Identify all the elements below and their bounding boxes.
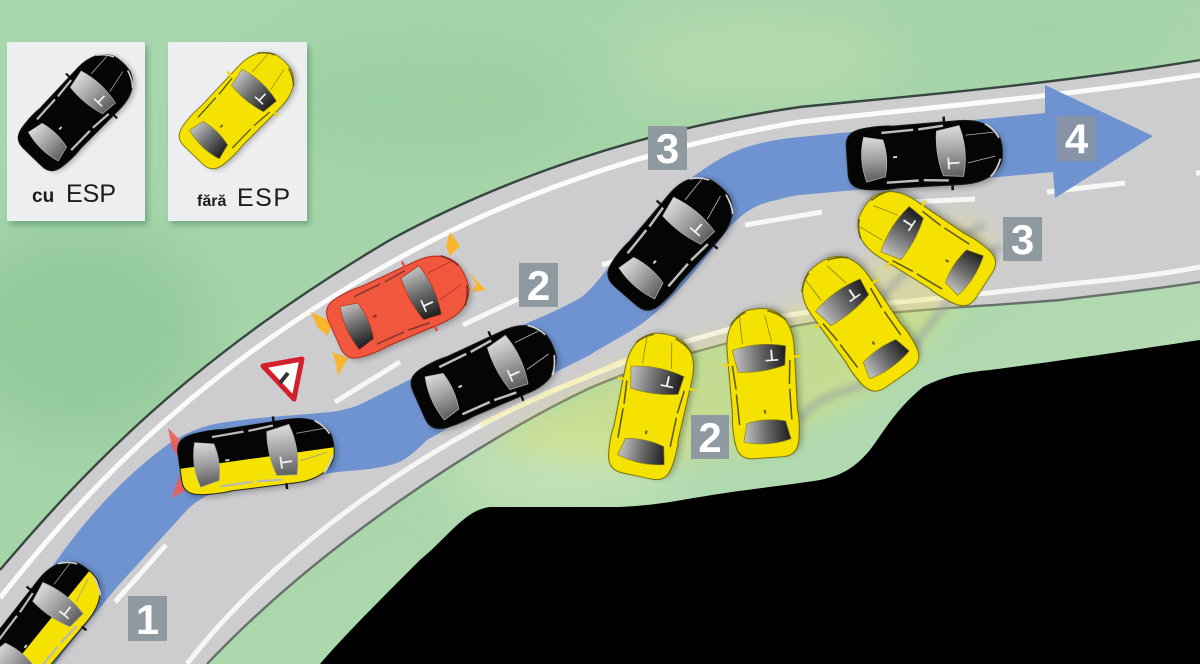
hazard lights: striped car xyxy=(168,428,190,498)
car: striped, bottom left xyxy=(0,560,106,664)
legend car: yellow xyxy=(169,36,310,179)
car: striped, swerving xyxy=(177,416,340,500)
badge: 2 top: 2 xyxy=(527,262,550,309)
badge: 3 yellow: 3 xyxy=(1011,216,1034,263)
car: yellow skid 1 xyxy=(599,325,706,484)
skid marks and yellow spray xyxy=(479,210,1003,470)
legend car: black xyxy=(8,38,149,181)
car: yellow skid 4 xyxy=(842,174,1005,318)
badge: 2 top xyxy=(519,262,558,309)
legend panel: without ESP xyxy=(168,36,310,225)
lane dashes xyxy=(115,173,1200,602)
legend label: fără ESP: fără xyxy=(197,193,226,210)
badge: 1: 1 xyxy=(136,596,159,643)
car: yellow skid 3 xyxy=(784,239,931,401)
warning triangle xyxy=(263,359,302,399)
car: yellow skid 2 xyxy=(719,304,807,460)
legend panel: with ESP xyxy=(7,38,149,225)
badge: 2 yellow xyxy=(691,414,729,461)
car: red obstacle xyxy=(319,240,483,370)
car: black, step 2 xyxy=(403,309,570,440)
badge: 2 yellow: 2 xyxy=(698,414,722,461)
badge: 4 xyxy=(1057,116,1096,162)
badge: 3 yellow xyxy=(1003,216,1042,263)
legend label: cu ESP: cu xyxy=(32,186,54,207)
hazard lights: red car xyxy=(311,232,486,376)
black area xyxy=(320,340,1200,664)
legend label: fără ESP: ESP xyxy=(237,184,292,212)
badge: 1 xyxy=(128,596,167,643)
car: black, step 3 xyxy=(596,160,751,321)
badge: 3 top: 3 xyxy=(656,125,679,172)
badge: 4: 4 xyxy=(1065,116,1089,162)
car: black, step 4 xyxy=(845,113,1007,197)
legend label: cu ESP: ESP xyxy=(66,180,116,208)
badge: 3 top xyxy=(648,125,687,172)
